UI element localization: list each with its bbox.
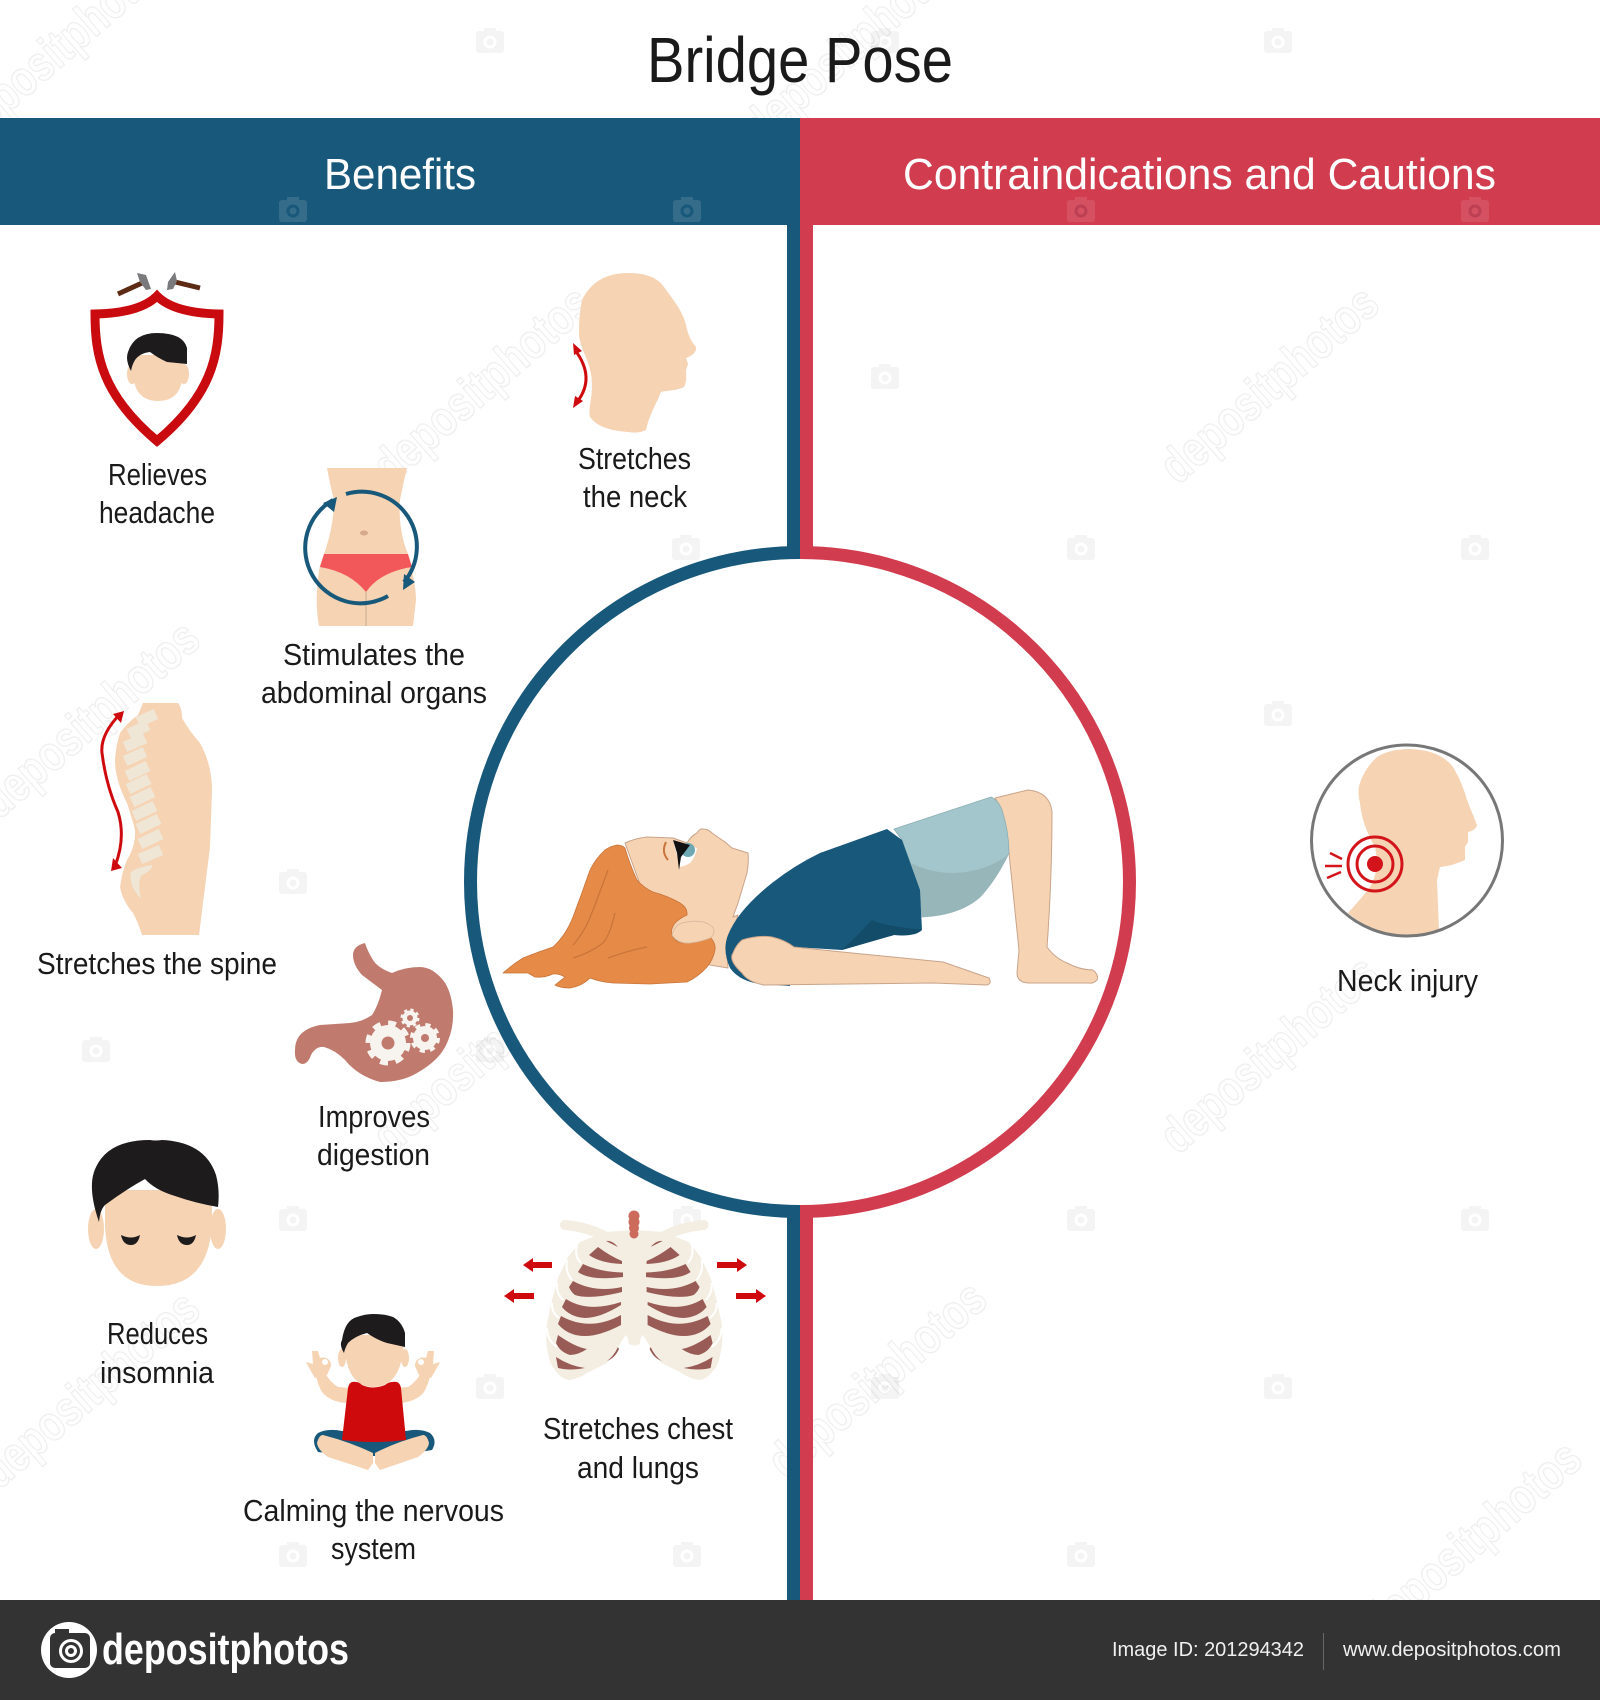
footer bar [0, 1600, 1600, 1700]
benefit: stretches chest and lungs [504, 1210, 766, 1485]
icon: stomach with gears [295, 943, 453, 1082]
footer logo [41, 1622, 349, 1678]
figure: eye white [673, 840, 697, 867]
label: stimulates the abdominal organs: Stimulates the [283, 637, 465, 672]
figure: eyebrow [664, 842, 668, 860]
header: benefits [0, 118, 800, 225]
label: stretches the neck: Stretches [578, 441, 691, 476]
label: stretches chest and lungs: and lungs [577, 1450, 699, 1485]
icon: meditating child [306, 1314, 440, 1470]
watermark pattern: depositphotos [757, 1269, 997, 1489]
label: calming the nervous system: system [331, 1531, 416, 1566]
label: relieves headache: headache [99, 495, 215, 530]
benefit: calming the nervous system [243, 1314, 504, 1566]
label: reduces insomnia: Reduces [107, 1316, 208, 1351]
icon: ribcage with arrows [504, 1210, 766, 1380]
label: stretches chest and lungs [543, 1411, 733, 1485]
header: contraindications and cautions [800, 118, 1600, 225]
benefit: stimulates the abdominal organs [261, 468, 487, 710]
watermark pattern: depositphotos [362, 274, 602, 494]
caution: neck injury [1312, 745, 1502, 998]
benefit: improves digestion [295, 943, 453, 1172]
figure: shorts [894, 797, 1009, 917]
figure: leg [995, 790, 1098, 983]
icon: shield with face [95, 296, 219, 441]
figure: hair streaks [573, 870, 647, 958]
label: improves digestion: Improves [318, 1099, 430, 1134]
watermark pattern: depositphotos [757, 599, 997, 819]
watermark cameras [82, 28, 1489, 1567]
label: stretches chest and lungs: Stretches chest [543, 1411, 733, 1446]
label: stimulates the abdominal organs: abdominal organs [261, 675, 487, 710]
watermark pattern: depositphotos [1149, 944, 1389, 1164]
watermark pattern: depositphotos [1149, 274, 1389, 494]
watermark pattern: depositphotos [362, 944, 602, 1164]
icon: head profile with arrow [573, 273, 696, 433]
label: stretches the spine: Stretches the spine [37, 946, 277, 981]
label: relieves headache: Relieves [108, 457, 207, 492]
header: benefits: Benefits [324, 150, 476, 199]
central divider: blue and red bars [787, 225, 813, 1600]
label: relieves headache [99, 457, 215, 530]
figure: neck and face [625, 829, 748, 968]
label: reduces insomnia: insomnia [100, 1355, 215, 1390]
footer url: www.depositphotos.com [1342, 1639, 1561, 1661]
figure: ear [672, 921, 714, 943]
label: stretches the neck: the neck [583, 479, 687, 514]
header: contraindications and cautions: Contraindications and Cautions [903, 150, 1496, 199]
label: reduces insomnia [100, 1316, 215, 1390]
label: calming the nervous system: Calming the nervous [243, 1493, 504, 1528]
title: Bridge Pose [647, 24, 953, 96]
benefit: relieves headache [95, 272, 219, 530]
label: improves digestion: digestion [317, 1137, 430, 1172]
footer logo: depositphotos [102, 1625, 349, 1674]
icon: hammers [118, 272, 200, 294]
benefit: stretches the neck [573, 273, 696, 514]
icon: sleeping face [88, 1140, 226, 1286]
figure: shirt [725, 829, 922, 986]
footer image id: Image ID: 201294342 [1112, 1639, 1304, 1661]
label: stimulates the abdominal organs [261, 637, 487, 710]
label: calming the nervous system [243, 1493, 504, 1566]
icon: neck pain target in circle [1312, 745, 1502, 936]
benefit: reduces insomnia [88, 1140, 226, 1390]
icon: abdomen with circular arrows [305, 468, 417, 626]
figure: iris [681, 843, 695, 857]
figure: hair [503, 845, 715, 988]
figure: eyelash [673, 840, 690, 870]
figure: arm [732, 936, 990, 985]
label: neck injury: Neck injury [1337, 963, 1478, 998]
central ring [470, 552, 1130, 1212]
figure: woman in bridge pose [503, 790, 1098, 988]
benefit: stretches the spine [37, 703, 277, 981]
label: stretches the neck [578, 441, 691, 514]
figure: shirt fold [842, 920, 922, 950]
label: improves digestion [317, 1099, 430, 1172]
icon: torso with spine and arrow [102, 703, 212, 935]
figure: shorts shadow [911, 855, 1008, 917]
